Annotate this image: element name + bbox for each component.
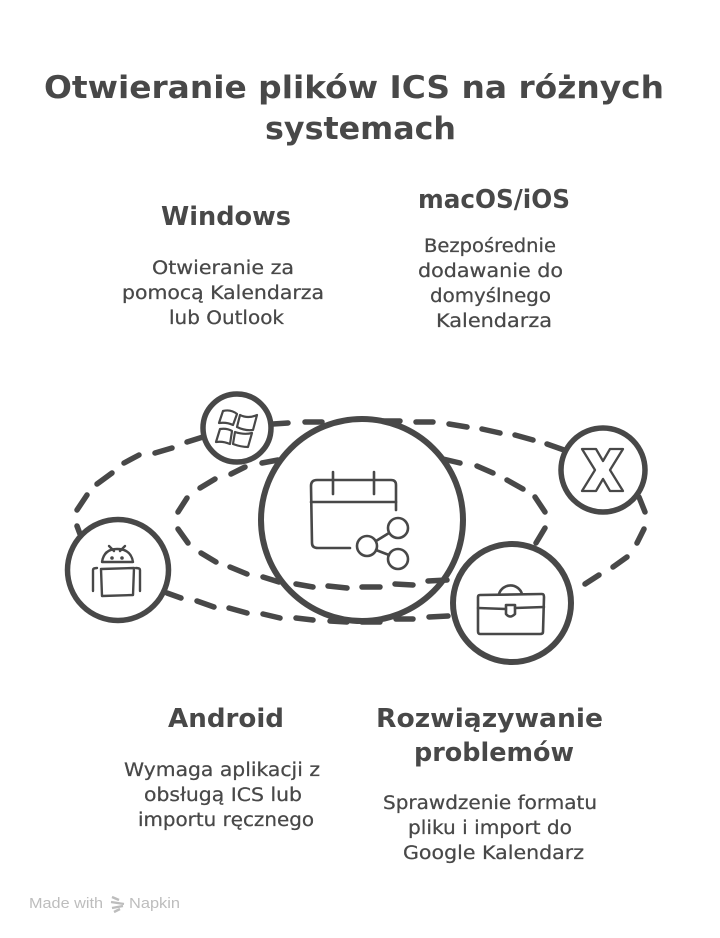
panel: Android xyxy=(124,704,320,831)
footer: Made with Napkin: Made with xyxy=(29,895,103,912)
text: Windows description: lub Outlook xyxy=(169,308,284,329)
text: troubleshooting description xyxy=(383,793,597,864)
text: macOS description: Kalendarza xyxy=(436,311,552,332)
icon: calendar with share xyxy=(311,472,408,569)
text: Android description: obsługą ICS lub xyxy=(144,785,302,806)
icon: briefcase xyxy=(478,585,544,634)
text: troubleshooting description: Sprawdzenie formatu xyxy=(383,793,597,814)
text: Android description: importu ręcznego xyxy=(138,810,314,831)
troubleshooting node xyxy=(453,544,571,662)
panel: macOS/iOS xyxy=(418,185,570,332)
macOS X node xyxy=(561,428,645,512)
text: macOS description: Bezpośrednie xyxy=(424,236,556,257)
central circle with calendar share icon xyxy=(261,419,463,621)
footer: Made with Napkin xyxy=(29,895,180,912)
text: Windows description xyxy=(122,258,324,329)
diagram: connected orbits xyxy=(68,394,645,662)
icon: Android robot xyxy=(93,546,140,596)
heading: macOS/iOS: macOS/iOS xyxy=(418,185,570,215)
footer: Made with Napkin: Napkin xyxy=(129,895,180,912)
heading: troubleshooting: Rozwiązywanie xyxy=(376,704,603,734)
Windows node xyxy=(203,394,271,462)
title: Otwieranie plików ICS na różnych xyxy=(44,70,664,106)
heading: Android: Android xyxy=(168,704,284,734)
outer dashed orbit xyxy=(77,421,645,622)
title xyxy=(44,70,664,147)
icon: Napkin logo xyxy=(111,897,124,912)
inner dashed orbit xyxy=(178,459,545,588)
title: systemach xyxy=(265,111,456,147)
text: troubleshooting description: pliku i import do xyxy=(408,818,572,839)
text: macOS description xyxy=(418,236,563,332)
text: Windows description: pomocą Kalendarza xyxy=(122,283,324,304)
text: troubleshooting description: Google Kalendarz xyxy=(403,843,584,864)
panel: troubleshooting xyxy=(376,704,603,864)
heading: troubleshooting: problemów xyxy=(414,738,574,768)
icon: X xyxy=(582,449,623,491)
text: Windows description: Otwieranie za xyxy=(152,258,294,279)
text: macOS description: dodawanie do xyxy=(418,261,563,282)
Android node xyxy=(68,520,168,620)
heading: Windows: Windows xyxy=(161,202,291,232)
icon: Android eyes xyxy=(110,556,124,560)
text: Android description xyxy=(124,760,320,831)
text: macOS description: domyślnego xyxy=(430,286,551,307)
heading: troubleshooting xyxy=(376,704,603,768)
text: Android description: Wymaga aplikacji z xyxy=(124,760,320,781)
icon: Windows logo xyxy=(216,410,257,447)
panel: Windows xyxy=(122,202,324,329)
